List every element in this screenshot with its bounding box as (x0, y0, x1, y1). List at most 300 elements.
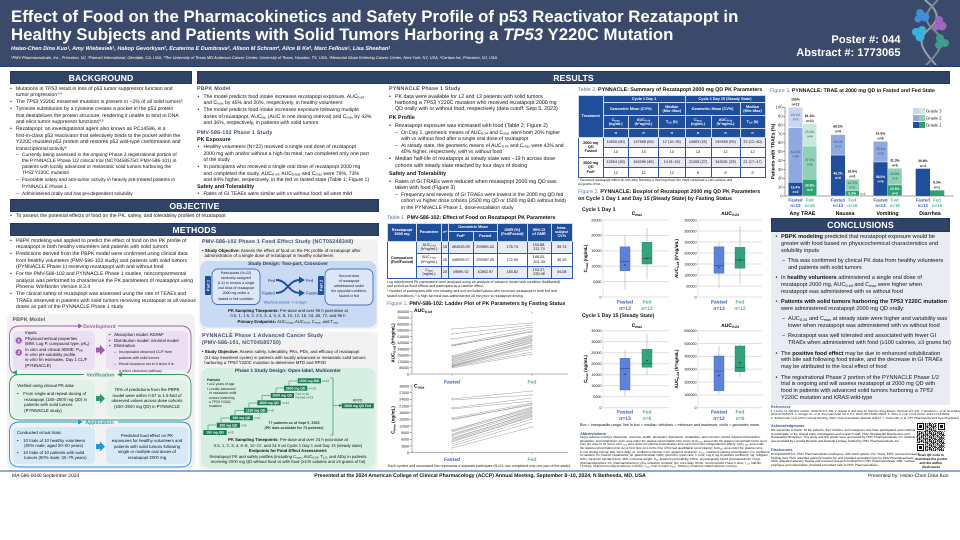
table 2: PK summary: (h*ng/mL) (635, 122, 652, 126)
table 1: food effect: 201.33 (533, 260, 545, 264)
part 2 tag: Part 2 (318, 279, 323, 291)
loop: application (10, 422, 191, 467)
chart: ladder plot AUC0-inf: 425000 (397, 341, 409, 345)
second dose box (325, 269, 373, 305)
text block: background: tumor progression1-4 (16, 92, 62, 98)
text: patient count (264, 420, 324, 430)
chart: boxplot Cmax day 1: C (632, 211, 635, 217)
category labels: Fed (806, 198, 814, 202)
heading: PMV-586-102 results: PMV-586-102 Phase 1 Study (197, 130, 273, 136)
text block: PK profile: Median half-life of rezatapopt at steady state was ~19 h across dose (395, 156, 555, 162)
chart: ladder plot AUC0-inf: 0-inf (392, 345, 396, 353)
chart: TRAE stacked bars: n=3 (849, 174, 855, 178)
chart: ladder plot Cmax: 9000 (401, 431, 409, 435)
chart: TRAE stacked bars: 18.8% (890, 172, 900, 176)
table 2: PK summary: n (697, 131, 699, 135)
crossover labels (262, 278, 319, 296)
table 2: PK summary: n (751, 131, 754, 135)
block arrows (96, 345, 105, 452)
chart: boxplot AUC day 15: 300000 (684, 368, 696, 372)
text: development inputs: (PYNNACLE) (25, 363, 51, 368)
RP2D box: 2000 mg QD Fed (344, 404, 371, 408)
conclusion: steady state: AUC0-24 and Cmax at steady state were higher and variability was (788, 316, 947, 322)
conclusion: PBPK modeling: greater with food based on physicochemical characteristics and (781, 241, 938, 247)
conclusion: healthy volunteers: rezatapopt 2000 mg, AUC0-inf and Cmax were higher when (781, 282, 922, 288)
chart: boxplot AUC day 1: 200000 (684, 251, 696, 255)
chart: TRAE stacked bars: n=8 (878, 136, 884, 140)
text block: PK profile: 40% higher, respectively, with vs without food (401, 149, 502, 155)
cohort sizes: n=13 (308, 386, 316, 390)
table 2: PK summary: 2000 mg (583, 161, 598, 165)
loop: verification (10, 374, 191, 420)
section heading: conclusions (771, 218, 950, 232)
chart: boxplot Cmax day 15: Fed (643, 410, 651, 416)
chart: boxplot AUC day 15: Fasted (711, 410, 727, 416)
panels: development (13, 331, 188, 370)
text: development models: – Renal clearance set to 0 since it is (114, 362, 174, 366)
bar labels: 46.2% (833, 172, 843, 176)
text block: PBPK results (198, 94, 372, 126)
bar labels: n=3 (807, 188, 813, 192)
chart: boxplot AUC day 15: 500000 (684, 342, 696, 346)
QR caption: and the author (920, 460, 942, 464)
text: patients: • ≥12 years of age (207, 382, 234, 386)
category labels (788, 198, 943, 208)
table 2: PK summary: 14963 (55) (689, 140, 707, 144)
diagram: PBPK development, verification, application (9, 324, 192, 468)
chart: TRAE stacked bars: 18.8% (847, 170, 857, 174)
chart: TRAE stacked bars: 12.5% (847, 181, 857, 185)
chart: TRAE stacked bars: 60 (778, 140, 783, 145)
labels: stages: Development (83, 324, 116, 330)
QR code (917, 423, 945, 451)
text: advanced cancer objective: • Study Objective: Assess safety, tolerability, PKs, PDs, and efficacy of rezatapopt (202, 349, 359, 354)
part 1 tag: Part 1 (205, 279, 210, 291)
chart: TRAE stacked bars: Patients with TRAEs (%) (770, 123, 776, 179)
text block: background: Administered orally and has pH-dependent solubility (22, 192, 133, 197)
text block: methods: The clinical safety of rezatapopt was assessed using the rate of TEAEs and (16, 291, 186, 297)
chart: ladder plot Cmax: 6000 (401, 438, 409, 442)
table 2 footnote: ≥3 grams of fat. (578, 182, 601, 186)
table 1 footnote (387, 280, 560, 298)
chart: boxplot AUC day 15: AUC (674, 379, 679, 389)
chart: boxplot AUC day 1: AUC (721, 211, 732, 217)
disclosures: Disclosures (771, 448, 793, 452)
text: timepoints and endpoints: receiving 2000 mg QD without food vs with food (≥100 calories and ≥3 grams of fat) (211, 459, 365, 464)
text block: PYNNACLE PK data: QD orally with or without food, respectively (data cutoff: Sept 5, 2023) (395, 106, 558, 112)
labels: stages (83, 324, 116, 426)
legend: Grade 1 (926, 123, 942, 128)
text block: PK exposure: and 84% higher, respectively, in the fed vs fasted state (Table 1; Figure 1) (204, 177, 369, 183)
crossover labels: Fasted (306, 290, 319, 296)
chart: boxplot AUC day 15: 200000 (684, 380, 696, 384)
conclusion: PBPK modeling: PBPK modeling predicted that rezatapopt exposure would be (781, 234, 935, 240)
text block: objective: To assess the potential effects of food on the PK, safety, and tolerability profiles of rezatapopt (16, 213, 226, 219)
chart: ladder plot Cmax: 12000 (399, 424, 409, 428)
figure 1 caption: Each symbol and associated line represents a separate participant (N=22; two completed only one part of the study). (388, 464, 571, 468)
RP2D box: RP2D (353, 399, 363, 403)
table 2: PK summary: (Min–Max) (662, 109, 681, 113)
cohort sizes: n=6 (268, 408, 274, 412)
text: development models: • Distribution model: minimal model (109, 338, 179, 343)
abbreviations: of variation; fm, fraction metabolized; GI, gastrointestinal; GMR, geometric mean ratio; h, hour; Log P, log of partition coefficient; mg, milligram; (580, 453, 769, 457)
text: verification result: (150–2500 mg QD) in PYNNACLE (114, 404, 180, 409)
conclusion: confirmed by clinical data: This was confirmed by clinical PK data from healthy volunteers (788, 258, 943, 264)
table 1: food effect: Intra- (557, 226, 567, 230)
subheading: PK profile: PK Profile (389, 115, 415, 121)
text: development models: • Elimination (109, 343, 135, 348)
chart: boxplot Cmax day 15: C (583, 380, 588, 383)
text: virtual trials: (50% male; aged 20–50 years) (24, 443, 83, 448)
chart: ladder plot Cmax: 0 (407, 451, 409, 455)
chart: boxplot AUC day 1: 250000 (684, 240, 696, 244)
chart: TRAE stacked bars: 30.8% (918, 159, 928, 163)
crossover labels: Fed (268, 278, 276, 283)
text: second dose: Second dose (339, 274, 359, 278)
panels: verification (13, 380, 188, 417)
conclusion: positive food effect (781, 351, 943, 371)
text: a minor clearance pathway (119, 369, 162, 373)
affiliations: 1PMV Pharmaceuticals, Inc., Princeton, NJ, 2Parexel International, Glendale, CA, USA, 3The University of Texas MD Anderson Cancer Center, University of Texas, Houston, TX, USA, 4Memorial Sloan Kettering Cancer Center, New York, NY, USA, 5Certara Inc, Princeton, NJ, USA (11, 54, 497, 60)
table 2: PK summary: Feda (587, 170, 595, 174)
chart: ladder plot AUC0-inf: 0 (407, 372, 409, 376)
chart: ladder plot AUC0-inf: 0-inf (425, 310, 433, 314)
text: sampling and endpoints: Primary Endpoints: AUC0-last, AUC0-inf, Cmax, and Tmax (238, 319, 338, 325)
chart: TRAE stacked bars: Any TRAE (790, 211, 816, 217)
subheading: safety PYNNACLE: Safety and Tolerability (389, 171, 446, 177)
chart: boxplot Cmax day 15: 5000 (593, 395, 602, 399)
text block: background: Currently being assessed in the ongoing Phase 2 registrational portion of (22, 153, 177, 158)
table 2: PK summary: 13 (696, 150, 700, 154)
chart: boxplot Cmax day 1: max (635, 213, 642, 217)
acknowledgments (771, 425, 914, 445)
conclusion: registrational phase 2: The registrational Phase 2 portion of the PYNNACLE Phase 1/2 (781, 375, 939, 381)
chart: boxplot Cmax day 1: (ng/mL) (583, 244, 588, 263)
text: application result: rezatapopt 2000 mg (128, 455, 166, 460)
category labels: n=13 (833, 203, 844, 208)
table 1: food effect: of GMR (532, 232, 546, 236)
QR caption: Scan QR code to (918, 452, 944, 456)
conclusion: healthy volunteers (781, 275, 922, 296)
table 2: PK summary: Cmax (694, 118, 702, 122)
text: development models (109, 332, 179, 373)
chart: TRAE stacked bars: 69.2% (833, 124, 843, 128)
chart: TRAE stacked bars: 100 (776, 105, 783, 110)
text: patient count: (PK data available for 73 patients) (264, 426, 324, 430)
text block: background: TP53 Y220C mutation (22, 171, 69, 176)
cohort sizes (228, 379, 329, 435)
acknowledgments: We would like to thank: All the patients, their families, and caregivers who have participated, and continue (771, 428, 915, 432)
abbreviations: Abbreviations (580, 430, 606, 436)
section heading: results (197, 71, 950, 84)
text: patients: tumors harboring (209, 396, 235, 400)
abbreviations: the plasma concentration-time curve from time zero to the time of the last quantifiable concentration; AUC tau, area under the plasma curve (580, 446, 763, 451)
chart: boxplot Cmax day 15: 0 (599, 406, 602, 410)
text block: PK exposure: 2000 mg with and/or without a high-fat meal; two completed only one part (204, 151, 369, 157)
cohort sizes: Fasted n=13 (296, 396, 314, 400)
acknowledgments: was provided by Lucinda Rennick and Danielle Lindsay, funded by PMV Pharmaceuticals, Inc. (771, 439, 900, 443)
bar labels: n=6 (835, 176, 841, 180)
title: Effect of Food on the Pharmacokinetics and Safety Profile of p53 Reactivator Rezatapopt in (11, 6, 738, 26)
chart: boxplot Cmax day 1: C (583, 269, 588, 272)
table 1: food effect: 259891.02 (476, 245, 494, 249)
table 2: PK summary: 12 (641, 171, 646, 175)
text block: PBPK results: The model predicts food intake increases exposure following multiple (204, 107, 359, 113)
table 1: food effect: 172.94 (506, 258, 518, 262)
heading: food effect study: PMV-586-102 Phase 1 Food Effect Study (NCT05248348) (202, 239, 353, 245)
chart: TRAE stacked bars: n=6 (807, 162, 813, 166)
table 1: food effect: subject (555, 230, 568, 234)
table 2: PK summary: 12 (10–26) (663, 140, 681, 144)
cohort sizes: n=3 (241, 423, 247, 427)
chart: TRAE stacked bars: 10 (778, 184, 783, 190)
conclusion: confirmed by clinical data (788, 258, 943, 272)
text: participants: oral dose of rezatapopt (218, 286, 254, 290)
bar labels: 15.4% (791, 186, 800, 190)
chart: boxplot AUC day 15 (672, 320, 764, 421)
table 1: food effect: 18 (443, 245, 447, 249)
conclusion: patients with solid tumors: Patients with solid tumors harboring the TP53 Y220C mutation (781, 299, 947, 305)
chart: ladder plot Cmax: 21000 (399, 404, 409, 408)
panel: PYNNACLE advanced cancer study (199, 332, 378, 469)
diagram: crossover study design (200, 261, 376, 328)
table 1: food effect: AUC0-inf (422, 243, 436, 248)
table 2: PK summary: Fasted (585, 149, 597, 153)
chart: ladder plot AUC0-inf: 510000 (397, 335, 409, 339)
text: application result: Predicted food effect on PK (121, 433, 173, 438)
chart: ladder plot Cmax: 3000 (401, 444, 409, 448)
references: 2016;37:865-876. 4. Joerger AC, et al. Proc Natl Acad Sci U S A. 2006;103:15056-15061. 5. Zhou X, et al. Front Oncol. 2023;13:1235082. (771, 412, 950, 416)
cohort sizes: n=3 (228, 431, 234, 435)
text block: methods: (PYNNACLE Phase 1) receiving rezatapopt with and without food (16, 264, 164, 270)
conclusion: positive food effect: The positive food effect may be due to enhanced solubilization (781, 351, 940, 357)
table 1: food effect: 178.74 (506, 245, 518, 249)
icon: DNA with protein (912, 0, 949, 65)
conclusion: healthy volunteers: rezatapopt was administered with vs without food (781, 289, 903, 295)
table 2: PK summary: QD (588, 165, 594, 169)
acknowledgments: Rezatapopt Medicines. This study and this poster were sponsored by PMV Pharmaceuticals, Inc. Medical writing (771, 435, 925, 439)
category labels: Fed (848, 198, 857, 202)
text: patients: Patients (207, 378, 220, 382)
chart: TRAE stacked bars: n=3 (892, 176, 898, 180)
chart: TRAE stacked bars: n=3 (878, 152, 883, 156)
chart: boxplot Cmax day 1: 15000 (591, 249, 602, 253)
table 1: food effect: Fasted (479, 234, 491, 238)
chart: boxplot Cmax day 15 (582, 320, 672, 421)
disclosures: HCDK/AW/MF/LS: PMV Pharmaceuticals employees, with stock options; HG: None; EED: received research (771, 452, 919, 456)
table 2: PK summary: 6 (697, 171, 699, 175)
abbreviations: from pre-dose to 24 hours; AUC 0-inf, area under the plasma concentration-time curve from zero extrapolated to infinity; AUC 0-last, area under (580, 442, 764, 447)
text block: background: transcriptional activity6 (16, 145, 67, 152)
table 1 footnote: Log transformed PK parameters were analyzed using an analysis of variance model with condition (fed/fasted) (387, 280, 560, 284)
table 1: food effect: 90% CI (533, 228, 545, 232)
table 2: PK summary: QD (588, 145, 594, 149)
chart: TRAE stacked bars: 61.5% (791, 150, 800, 154)
text: verification data: • From single and repeat dosing of (17, 391, 86, 396)
table 2: PK summary: 164596 (46) (633, 160, 654, 164)
abbreviations: MTD, maximum tolerated dose; MW, molecular weight; P eff, apparent permeability; PBPK, physiologically based pharmacokinetic; PD(s), (580, 457, 761, 462)
chart: boxplot Cmax day 15: 30000 (591, 340, 602, 344)
dose labels: 2000 mg QD (272, 394, 293, 398)
section heading: methods (10, 223, 379, 236)
table title 2: Table 2. PYNNACLE: Summary of Rezatapopt 2000 mg QD PK Parameters (578, 87, 762, 93)
text block: PK exposure: and completed the study, AUC0-inf, AUC0-last and Cmax were 79%, 73% (204, 171, 359, 177)
poster and abstract numbers (796, 34, 900, 59)
table 2: PK summary: 22 (12–40) (743, 140, 762, 144)
loop: development (10, 326, 191, 373)
text: development models: • Absorption model: ADAMa (109, 332, 164, 337)
text block: PK profile: At steady state, the geometric means of AUC0-24 and Cmax were 42% and (401, 143, 564, 149)
conclusion: healthy volunteers: In healthy volunteers administered a single oral dose of (781, 275, 922, 281)
chart: ladder plot Cmax: max (392, 424, 396, 431)
panel: conclusions text (771, 232, 950, 405)
bars: nausea (831, 135, 859, 196)
text: development inputs: in vitro fm estimates, Day 1 CL/F (25, 357, 87, 362)
text block: background: first-in-class p53 reactivator that selectively binds to the pocket within the (16, 133, 180, 139)
table 1: food effect: (ng/mL) (422, 272, 436, 276)
panel: PBPK model (6, 314, 195, 469)
text: patients: or metastatic solid (209, 391, 236, 395)
text: participants: Participants (N=22) (221, 270, 251, 274)
text: virtual trials: • 10 trials of 10 healthy volunteers (17, 438, 85, 443)
text: development inputs: Inputs (25, 330, 37, 335)
text block: PK profile: On Day 1, geometric means of AUC0-24 and Cmax were both 20% higher (401, 130, 560, 136)
chart: TRAE stacked bars: n=2 (849, 186, 855, 190)
text block: methods: doses as part of the PYNNACLE Phase 1 study (16, 304, 123, 310)
text block: methods: from healthy volunteers (PMV-586-102 study) and patients with solid tumors (16, 258, 187, 264)
category labels: Fasted (916, 198, 930, 202)
legend: Grade 2 (926, 116, 942, 121)
text block: background: Rezatapopt, an investigational agent also known as PC14586, is a (16, 126, 166, 132)
chart: boxplot AUC day 1: AUC (674, 268, 679, 278)
chart: ladder plot Cmax: (ng/mL) (390, 406, 396, 424)
chart: ladder plot AUC0-inf: 255000 (397, 354, 409, 358)
text block: background: Favorable safety and anti-tumor activity in heavily pre-treated patients in (22, 178, 175, 183)
dose labels: 150 mg QD (206, 431, 224, 435)
table 1: food effect: CV% (557, 234, 566, 238)
chart: TRAE stacked bars: n=5 (892, 164, 898, 168)
chart: ladder plot AUC0-inf: AUC (414, 308, 425, 314)
table 2: PK summary: Median (665, 105, 678, 109)
text: patients (207, 378, 236, 408)
figure title 3: Figure 3. PYNNACLE: TRAE at 2000 mg QD in Fasted and Fed State (770, 88, 935, 94)
text block: PK profile (389, 122, 564, 169)
chart: ladder plot AUC0-inf (390, 308, 568, 385)
table 2: PK summary: 13 (670, 150, 674, 154)
chart: boxplot AUC day 1: (h*ng/mL) (674, 239, 679, 262)
chart: boxplot AUC day 15: 0 (694, 406, 696, 410)
chart: boxplot AUC day 1: 0-24 (732, 213, 739, 217)
chart: boxplot Cmax day 15: max (585, 373, 589, 380)
chart: boxplot Cmax day 15: C (632, 323, 635, 329)
text block: PYNNACLE PK data: PK data were available for 12 and 13 patients with solid tumors (395, 94, 543, 100)
QR caption: download the poster (915, 456, 947, 460)
text: patient count: 77 patients as of Sept 5, 2023 (268, 420, 320, 424)
figure title 2: Figure 2. PYNNACLE: Boxplot of Rezatapopt 2000 mg QD PK Parameters (578, 189, 760, 195)
text block: methods: rezatapopt in both healthy volunteers and patients with solid tumors (16, 244, 168, 250)
dose labels: 1800 mg QD (259, 401, 279, 405)
conclusion: positive food effect: may be attributed to the local effect of food (781, 364, 887, 370)
text block: background: the PYNNACLE Phase 1/2 clinical trial (NCT04585750; PMV-586-101) in (22, 159, 176, 164)
chart: ladder plot AUC0-inf: 850000 (397, 310, 409, 314)
arrowheads (12, 324, 122, 424)
text block: safety: Rates of GI TEAEs were similar with vs without food; all were mild (204, 191, 352, 197)
category labels: n=16 (847, 203, 858, 208)
category labels: Fasted (831, 198, 845, 202)
acknowledgments: to participate, in the clinical trials; investigators and research staff; PMV; Rezatapopt Biosciences and (771, 432, 909, 436)
chart: TRAE stacked bars: n=4 (920, 164, 926, 168)
table 2: PK summary: 6 (751, 171, 754, 175)
chart: boxplot Cmax day 15: Fasted (617, 410, 633, 416)
table 1: food effect: 448599.57 (452, 258, 470, 262)
subheading: PK exposure: PK Exposure (197, 137, 231, 143)
header banner (0, 0, 960, 66)
dose steps connectors (208, 381, 297, 430)
chart: ladder plot Cmax: 27000 (399, 391, 409, 395)
chart: TRAE stacked bars: 70 (778, 131, 783, 136)
conclusion: registrational phase 2 (781, 375, 939, 402)
table 2: PK summary: (ng/mL) (609, 122, 623, 126)
text: participants: randomly assigned (221, 276, 251, 280)
table 2: PK summary: 13 (641, 150, 646, 154)
conclusion: PBPK modeling: solubility inputs (781, 248, 819, 254)
table 1: food effect: 20 (443, 258, 447, 262)
text block: background: Y220C-mutated p53 protein and restores p53 wild-type conformation and (16, 139, 181, 145)
chart: TRAE stacked bars: 31.3% (890, 158, 900, 162)
diagram: PBPK development, verification, application: 2 (17, 350, 20, 355)
table 1: food effect: 259397.05 (476, 258, 494, 262)
text: application result: exposures for healthy volunteers and (112, 438, 182, 443)
text block: methods: TRAEs observed in patients with solid tumors receiving rezatapopt at all various (16, 298, 196, 304)
text: development models: patients with solid tumors (119, 356, 159, 360)
chart: ladder plot Cmax: 24000 (399, 398, 409, 402)
authors: Hsiao-Chen Dina Kuo1, Amy Wiebesiek1, Hakop Gevorkyan2, Ecaterina E Dumbrava3, Alison M Schram4, Alice B Ke5, Marc Fellous1, Lisa Sheehan1 (11, 45, 390, 52)
chart: TRAE stacked bars: 81.3% (805, 114, 815, 118)
chart: boxplot AUC day 15: 0-24 (732, 325, 739, 329)
chart: boxplot Cmax day 1: Fasted (617, 300, 633, 306)
abbreviations: in one dosing interval; BID, twice daily; CI, confidence interval; CL/F, apparent clearance; C max, maximum plasma concentration; CV, coefficient (580, 450, 769, 454)
chart: boxplot AUC day 1: n=12 (734, 306, 746, 312)
heading: advanced cancer study: PYNNACLE Phase 1 Advanced Cancer Study (202, 333, 323, 339)
table 1: food effect: AUC0-last (422, 255, 436, 260)
text block: PK exposure: Healthy volunteers (N=22) received a single oral dose of rezatapopt (204, 144, 356, 150)
chart: boxplot Cmax day 1: 25000 (591, 218, 602, 222)
chart: ladder plot Cmax (390, 384, 568, 462)
conclusion: PBPK modeling (781, 234, 938, 255)
chart: TRAE stacked bars: n=1 (860, 192, 866, 196)
chart: boxplot AUC day 1 (672, 209, 764, 312)
text: development inputs (25, 330, 90, 368)
participants box (212, 269, 260, 304)
table 1: food effect: na (443, 230, 447, 234)
QR caption: disclosures (922, 464, 940, 468)
dose labels (206, 379, 320, 435)
chart: boxplot Cmax day 15: 20000 (591, 362, 602, 366)
QR caption (915, 452, 947, 470)
table 2: PK summary: Cycle 1 Day 15 (Steady State) (699, 97, 752, 101)
dose labels: 600 mg QD (233, 416, 251, 420)
chart: boxplot AUC day 1: 150000 (684, 262, 696, 266)
bar labels (791, 172, 900, 196)
text block: background: PYNNACLE Phase 1 (22, 185, 67, 190)
diagram: crossover study design: Washout period: 7–9 days (264, 300, 307, 304)
footer band (0, 470, 960, 472)
text: food effect objective: • Study Objective: Assess the effect of food on the PK profile of rezatapopt after (202, 248, 361, 253)
cohort sizes: n=12 (322, 379, 329, 383)
text block: PK profile: cohorts with steady state reached by four days of dosing (395, 163, 527, 169)
chart: TRAE stacked bars: n=4 (807, 134, 813, 138)
text block: PYNNACLE safety: Rates of GI TRAEs were reduced when rezatapopt 2000 mg QD was (395, 178, 557, 184)
